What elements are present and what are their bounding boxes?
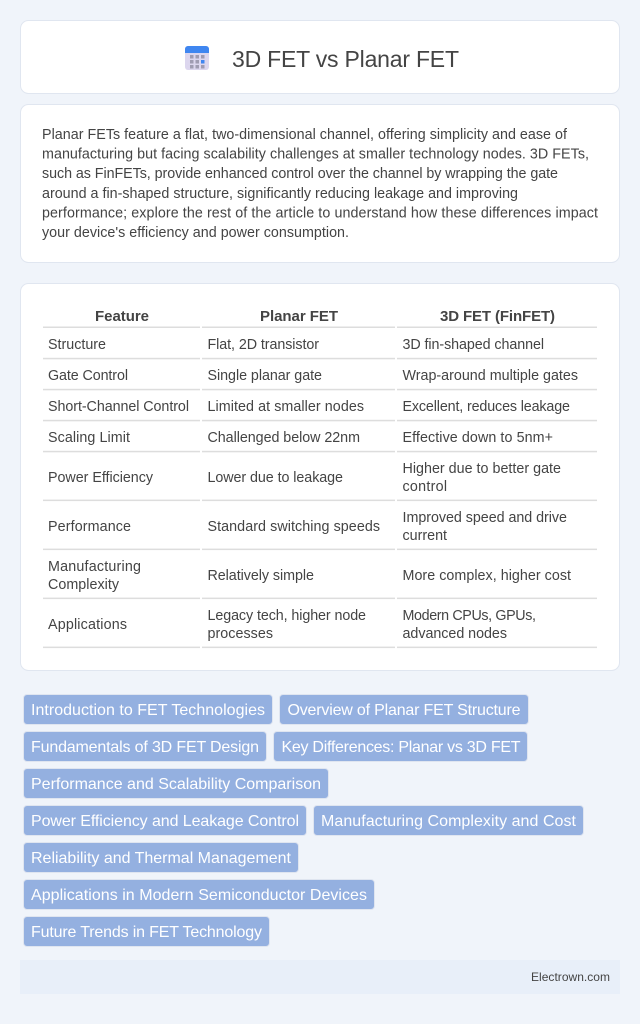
row: Power Efficiency: Higher due to better gate bbox=[402, 461, 561, 477]
row: Performance: current bbox=[402, 528, 447, 544]
panel: introduction text: manufacturing but facing scalability challenges at smaller technology nodes. 3D FETs, bbox=[42, 147, 589, 163]
tag: Performance and Scalability Comparison: Performance and Scalability Comparison bbox=[31, 776, 321, 793]
row: Applications: processes bbox=[208, 626, 273, 642]
icon: calendar bbox=[185, 46, 209, 70]
row: Power Efficiency: control bbox=[402, 479, 447, 495]
tag: Performance and Scalability Comparison bbox=[24, 768, 328, 798]
row: Scaling Limit bbox=[48, 430, 553, 446]
row: Performance: Standard switching speeds bbox=[208, 519, 380, 535]
tag: Reliability and Thermal Management bbox=[24, 842, 298, 872]
row: Scaling Limit: Scaling Limit bbox=[48, 430, 130, 446]
tag: Overview of Planar FET Structure bbox=[280, 694, 528, 724]
topic tags bbox=[24, 694, 584, 946]
tag: Future Trends in FET Technology bbox=[24, 916, 270, 946]
table header row: Feature bbox=[95, 308, 149, 325]
row: Power Efficiency: Lower due to leakage bbox=[208, 470, 343, 486]
row: Short-Channel Control: Short-Channel Control bbox=[48, 399, 189, 415]
panel: comparison table bbox=[20, 284, 620, 670]
row: Power Efficiency bbox=[48, 461, 561, 495]
tag: Applications in Modern Semiconductor Devices: Applications in Modern Semiconductor Devices bbox=[31, 887, 367, 904]
row: Performance: Performance bbox=[48, 519, 131, 535]
row: Manufacturing Complexity: Manufacturing bbox=[48, 559, 141, 575]
tag: Applications in Modern Semiconductor Devices bbox=[24, 880, 374, 910]
row: Applications bbox=[48, 608, 536, 642]
row: Gate Control bbox=[48, 368, 578, 384]
tag: Manufacturing Complexity and Cost bbox=[314, 806, 584, 836]
footer: Electrown.com bbox=[531, 970, 610, 984]
table header row: Planar FET bbox=[260, 308, 338, 325]
header panel bbox=[20, 20, 620, 94]
row: Applications: advanced nodes bbox=[402, 626, 507, 642]
row: Short-Channel Control: Limited at smaller nodes bbox=[208, 399, 364, 415]
row: Applications: Applications bbox=[48, 617, 127, 633]
row: Gate Control: Wrap-around multiple gates bbox=[402, 368, 578, 384]
tag: Fundamentals of 3D FET Design: Fundamentals of 3D FET Design bbox=[31, 739, 259, 756]
row: Structure: Flat, 2D transistor bbox=[208, 337, 319, 353]
row: Short-Channel Control: Excellent, reduces leakage bbox=[402, 399, 570, 415]
footer bbox=[20, 960, 620, 994]
table header row: 3D FET (FinFET) bbox=[440, 308, 555, 325]
tag: Introduction to FET Technologies: Introduction to FET Technologies bbox=[31, 702, 265, 719]
tag: Introduction to FET Technologies bbox=[24, 694, 272, 724]
row: Applications: Modern CPUs, GPUs, bbox=[402, 608, 536, 624]
table grid lines bbox=[43, 326, 597, 648]
row: Manufacturing Complexity: More complex, higher cost bbox=[402, 568, 571, 584]
panel: introduction text: around a fin-shaped structure, significantly reducing leakage and improving bbox=[42, 186, 518, 202]
row: Scaling Limit: Effective down to 5nm+ bbox=[402, 430, 553, 446]
table header row bbox=[95, 308, 555, 325]
tag: Power Efficiency and Leakage Control: Power Efficiency and Leakage Control bbox=[31, 813, 299, 830]
row: Manufacturing Complexity bbox=[48, 559, 571, 593]
tag: Reliability and Thermal Management: Reliability and Thermal Management bbox=[31, 850, 292, 867]
row: Performance bbox=[48, 510, 567, 544]
tag: Fundamentals of 3D FET Design bbox=[24, 732, 266, 762]
row: Gate Control: Gate Control bbox=[48, 368, 128, 384]
row: Power Efficiency: Power Efficiency bbox=[48, 470, 154, 486]
title: 3D FET vs Planar FET bbox=[232, 46, 459, 72]
row: Structure bbox=[48, 337, 544, 353]
row: Gate Control: Single planar gate bbox=[208, 368, 322, 384]
tag: Power Efficiency and Leakage Control bbox=[24, 806, 306, 836]
panel: introduction text: Planar FETs feature a flat, two-dimensional channel, offering simplicity and ease of bbox=[42, 127, 567, 143]
row: Manufacturing Complexity: Complexity bbox=[48, 577, 120, 593]
row: Structure: 3D fin-shaped channel bbox=[402, 337, 544, 353]
tag: Future Trends in FET Technology: Future Trends in FET Technology bbox=[31, 924, 262, 941]
row: Performance: Improved speed and drive bbox=[402, 510, 567, 526]
row: Short-Channel Control bbox=[48, 399, 570, 415]
panel: introduction text bbox=[20, 104, 620, 262]
tag: Overview of Planar FET Structure: Overview of Planar FET Structure bbox=[288, 702, 521, 719]
panel: introduction text: your device's efficiency and power consumption. bbox=[42, 225, 349, 241]
panel: introduction text: performance; explore the rest of the article to understand how these differences impact bbox=[42, 205, 598, 221]
panel: introduction text: such as FinFETs, provide enhanced control over the channel by wrapping the gate bbox=[42, 166, 558, 182]
tag: Manufacturing Complexity and Cost: Manufacturing Complexity and Cost bbox=[321, 813, 577, 830]
tag: Key Differences: Planar vs 3D FET: Key Differences: Planar vs 3D FET bbox=[282, 739, 521, 756]
row: Scaling Limit: Challenged below 22nm bbox=[208, 430, 360, 446]
tag: Key Differences: Planar vs 3D FET bbox=[274, 732, 528, 762]
row: Applications: Legacy tech, higher node bbox=[208, 608, 366, 624]
row: Manufacturing Complexity: Relatively simple bbox=[208, 568, 314, 584]
row: Structure: Structure bbox=[48, 337, 106, 353]
